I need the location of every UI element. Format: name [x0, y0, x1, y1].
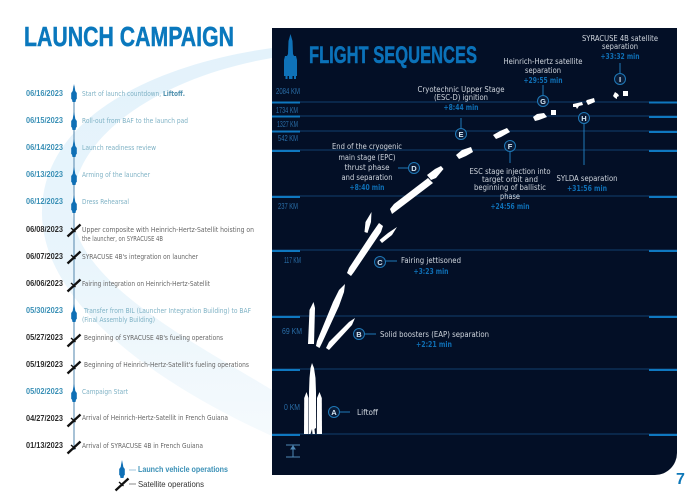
callout: F ballistic phase: beginning of ballistic [474, 183, 546, 192]
callout: I SYRACUSE: I [619, 75, 621, 84]
event 06/16/2023 [26, 84, 185, 102]
event 05/27/2023 [26, 333, 223, 346]
event 06/14/2023: 06/14/2023 [26, 143, 64, 152]
spacecraft stage F [493, 128, 510, 139]
event 04/27/2023: Arrival of Heinrich-Hertz-Satellit in French Guiana [82, 414, 228, 422]
altitude labels: 1734 KM [276, 106, 298, 115]
callout: I SYRACUSE [582, 34, 658, 84]
callout: I SYRACUSE: +33:32 min [600, 52, 640, 61]
event 06/08/2023: Upper composite with Heinrich-Hertz-Satellit hoisting on [82, 226, 254, 234]
callout: G Heinrich-Hertz [504, 57, 583, 106]
callout: C fairing: +3:23 min [414, 267, 448, 276]
callout: I SYRACUSE: separation [602, 42, 638, 51]
callout: H SYLDA [556, 112, 618, 193]
event 05/27/2023: Beginning of SYRACUSE 4B's fueling operations [84, 334, 223, 342]
callout: A liftoff: Liftoff [357, 408, 379, 417]
rocket stage: solid booster separation [308, 284, 355, 350]
altitude labels [276, 87, 302, 412]
event 05/02/2023 [26, 384, 128, 402]
event 06/07/2023 [26, 252, 198, 264]
event 06/14/2023: Launch readiness review [82, 144, 156, 152]
callout: H SYLDA: +31:56 min [567, 184, 607, 193]
event 06/15/2023: Roll-out from BAF to the launch pad [82, 117, 188, 125]
event 05/02/2023: 05/02/2023 [26, 387, 64, 396]
callout: G Heinrich-Hertz: Heinrich-Hertz satellite [504, 57, 583, 66]
altitude labels: 1327 KM [277, 120, 298, 129]
callout: D cryogenic stage: End of the cryogenic [332, 142, 402, 151]
altitude labels: 542 KM [278, 134, 298, 143]
callout: D cryogenic stage: and separation [342, 173, 393, 182]
callout: D cryogenic stage: D [411, 164, 417, 173]
rocket stage: liftoff [304, 363, 322, 434]
altitude labels: 117 KM [284, 256, 301, 265]
event 06/16/2023: Start of launch countdown, Liftoff. [82, 90, 185, 98]
event 06/06/2023 [26, 279, 210, 292]
event 05/30/2023: 05/30/2023 [26, 306, 64, 315]
rocket stage: fairing jettison [347, 212, 397, 276]
event 06/07/2023: SYRACUSE 4B's integration on launcher [82, 253, 198, 261]
event 05/02/2023: Campaign Start [82, 388, 128, 396]
event 05/27/2023: 05/27/2023 [26, 333, 64, 342]
event 05/30/2023 [26, 304, 251, 324]
callout: F ballistic phase: target orbit and [482, 175, 538, 184]
altitude labels: 237 KM [278, 202, 298, 211]
event 06/13/2023: Arming of the launcher [82, 171, 150, 179]
altitude lines [272, 102, 677, 435]
event 06/07/2023: 06/07/2023 [26, 252, 64, 261]
callout: B solid boosters: +2:21 min [416, 340, 452, 349]
altitude labels: 2084 KM [276, 87, 300, 96]
event 06/16/2023: 06/16/2023 [26, 89, 64, 98]
callout: C fairing [374, 256, 461, 276]
legend: satellite operations: Satellite operations [138, 479, 204, 489]
callout: D cryogenic stage: +8:40 min [350, 183, 384, 192]
event 06/12/2023 [26, 195, 129, 213]
callout: H SYLDA: H [581, 114, 587, 123]
callout: G Heinrich-Hertz: separation [525, 66, 561, 75]
panel: flight sequences [272, 28, 677, 475]
callout: E cryotechnic upper stage: +8:44 min [444, 103, 478, 112]
callout: F ballistic phase: phase [500, 192, 520, 201]
callout: H SYLDA: SYLDA separation [556, 174, 618, 183]
callout: E cryotechnic upper stage: (ESC-D) ignition [434, 93, 488, 102]
event 06/08/2023 [26, 224, 254, 243]
event 06/15/2023: 06/15/2023 [26, 116, 64, 125]
legend [116, 460, 228, 490]
event 06/14/2023 [26, 139, 156, 157]
page number: 7 [676, 471, 685, 488]
icon: height scale [286, 445, 300, 457]
callout: E cryotechnic upper stage [418, 85, 505, 140]
event 06/06/2023: Fairing integration on Heinrich-Hertz-Satellit [82, 280, 210, 288]
event 04/27/2023: 04/27/2023 [26, 414, 64, 423]
callout: F ballistic phase: F [508, 142, 513, 151]
callout: B solid boosters: Solid boosters (EAP) separation [380, 330, 489, 339]
event 05/19/2023: Beginning of Heinrich-Hertz-Satellit's fueling operations [84, 361, 249, 369]
title: launch campaign: LAUNCH CAMPAIGN [24, 21, 234, 52]
event 05/30/2023: Transfer from BIL (Launcher Integration Building) to BAF [83, 307, 251, 315]
event 01/13/2023: Arrival of SYRACUSE 4B in French Guiana [82, 442, 203, 450]
event 06/12/2023: 06/12/2023 [26, 197, 64, 206]
callout: G Heinrich-Hertz: G [540, 97, 546, 106]
spacecraft stage I [613, 91, 628, 99]
event 06/13/2023 [26, 167, 150, 185]
callout: A liftoff [328, 406, 379, 418]
legend: launch vehicle operations: Launch vehicle operations [138, 464, 228, 474]
callout: G Heinrich-Hertz: +29:55 min [524, 76, 562, 85]
background swoosh [42, 48, 272, 436]
callout: F ballistic phase: +24:56 min [490, 202, 530, 211]
event 04/27/2023 [26, 414, 228, 426]
callout: I SYRACUSE: SYRACUSE 4B satellite [582, 34, 658, 43]
spacecraft stage G [533, 110, 556, 121]
callout: C fairing: Fairing jettisoned [401, 256, 461, 265]
altitude labels: 69 KM [282, 327, 302, 336]
heading: flight sequences: FLIGHT SEQUENCES [309, 42, 477, 69]
callout: D cryogenic stage: main stage (EPC) [338, 153, 396, 162]
spacecraft stage E [456, 147, 473, 159]
event 06/15/2023 [26, 112, 188, 130]
event 05/30/2023: (Final Assembly Building) [82, 316, 155, 324]
callout: E cryotechnic upper stage: E [458, 130, 464, 139]
event 05/19/2023 [26, 360, 249, 374]
event 06/08/2023: the launcher, on SYRACUSE 4B [82, 235, 163, 243]
altitude labels: 0 KM [284, 403, 300, 412]
callout: B solid boosters [354, 328, 489, 349]
timeline: launch campaign [26, 84, 254, 454]
event 01/13/2023 [26, 441, 203, 454]
event 05/19/2023: 05/19/2023 [26, 360, 64, 369]
event 06/08/2023: 06/08/2023 [26, 225, 64, 234]
event 06/12/2023: Dress Rehearsal [82, 198, 129, 206]
callout: F ballistic phase [470, 140, 551, 211]
event 06/13/2023: 06/13/2023 [26, 170, 64, 179]
callout: E cryotechnic upper stage: Cryotechnic Upper Stage [418, 85, 505, 94]
event 06/06/2023: 06/06/2023 [26, 279, 64, 288]
spacecraft stage H [573, 98, 595, 109]
callout: B solid boosters: B [356, 330, 362, 339]
callout: D cryogenic stage [332, 142, 420, 192]
callout: F ballistic phase: ESC stage injection into [470, 167, 551, 176]
callout: C fairing: C [377, 258, 383, 267]
callout: D cryogenic stage: thrust phase [344, 163, 390, 172]
rocket stage: main stage separation [390, 166, 444, 214]
icon: blue rocket [284, 34, 297, 79]
event 01/13/2023: 01/13/2023 [26, 441, 64, 450]
callout: A liftoff: A [331, 408, 337, 417]
